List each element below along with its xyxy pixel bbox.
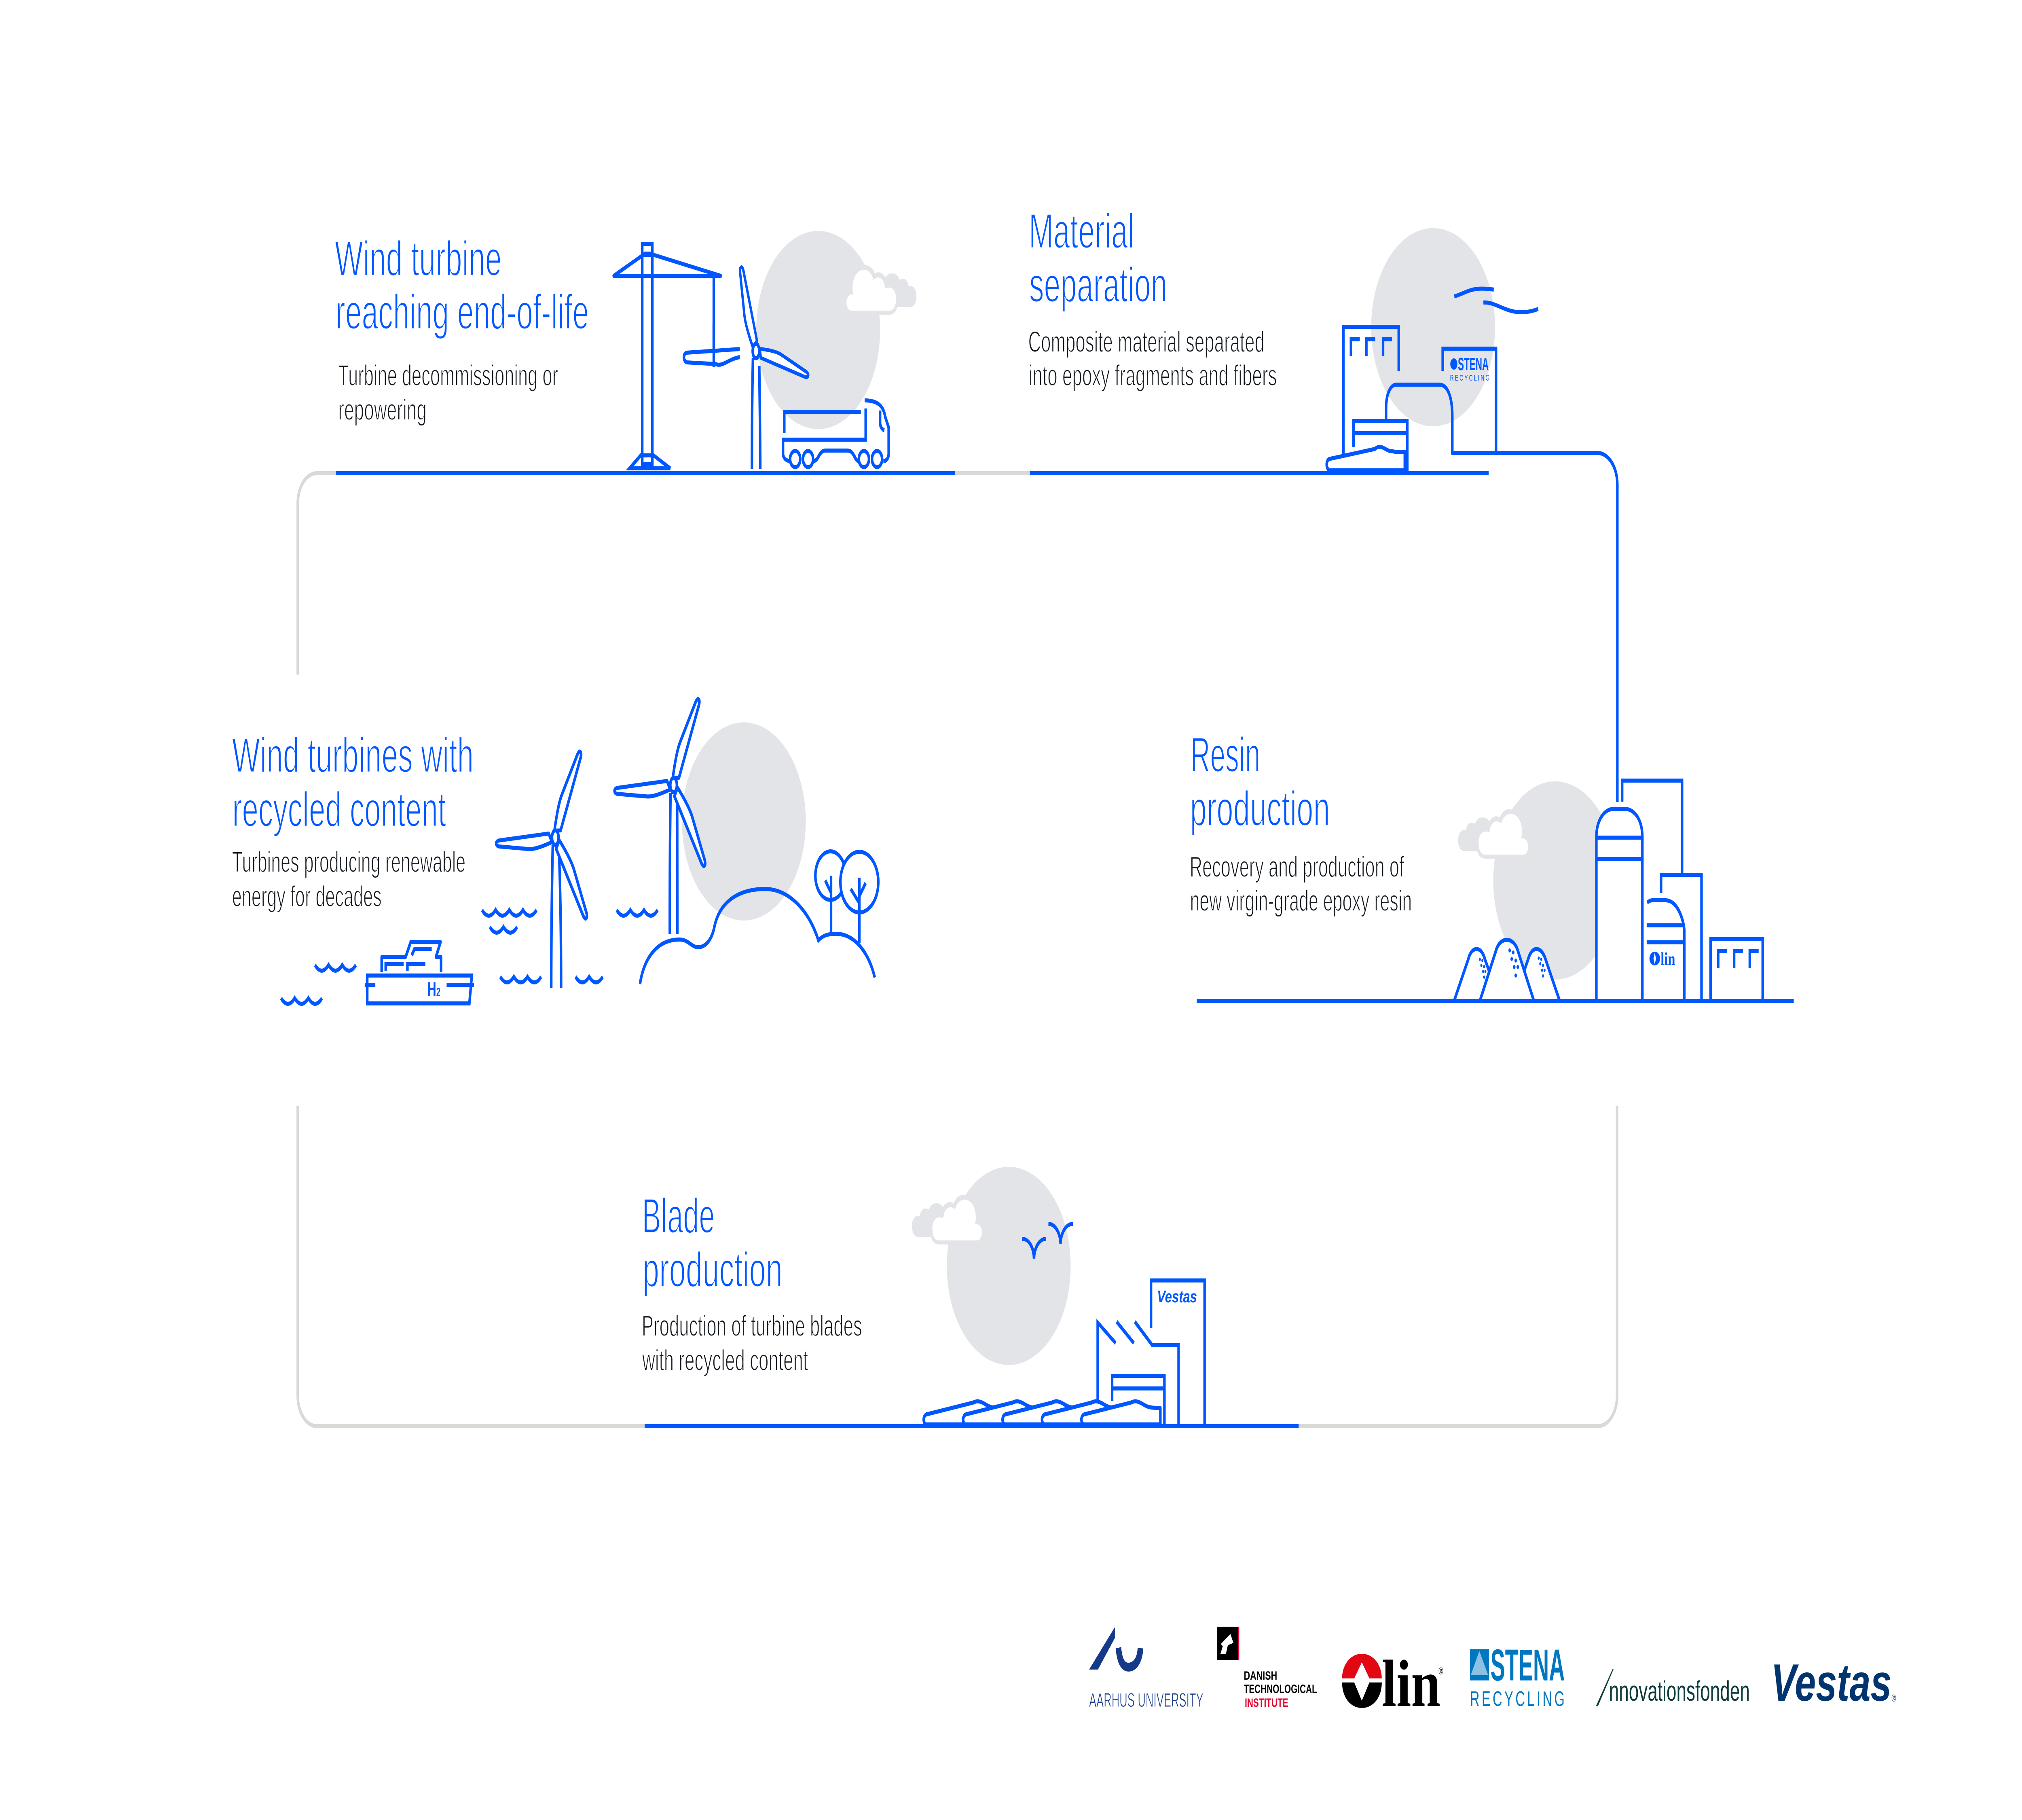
ground line	[1197, 999, 1794, 1003]
heading: resin production: production	[1190, 781, 1330, 836]
icon: truck	[782, 400, 889, 467]
logo: olin	[1342, 1646, 1443, 1721]
sun circle	[682, 722, 806, 921]
text: turbine decommissioning	[338, 359, 558, 426]
heading: wind turbines with recycled content: Wind turbines with	[232, 728, 474, 783]
logo: vestas: ®	[1892, 1693, 1896, 1704]
logo: stena recycling: STENA	[1491, 1641, 1565, 1690]
heading: resin production: Resin	[1191, 727, 1260, 782]
icon: hydrogen boat	[365, 942, 474, 1003]
sun circle	[1493, 781, 1617, 980]
panel: wind turbine reaching end-of-life	[335, 231, 955, 473]
ground line	[645, 1424, 1299, 1428]
logo: stena	[1450, 354, 1489, 383]
text: composite material: into epoxy fragments and fibers	[1029, 359, 1277, 392]
ground line	[336, 471, 955, 475]
icon: resin plant	[1597, 781, 1763, 1001]
logo: danish technological institute: TECHNOLOGICAL	[1244, 1682, 1317, 1696]
icon: hills	[640, 889, 875, 984]
text: composite material	[1028, 326, 1277, 392]
ground line	[1030, 471, 1489, 475]
logo: stena: RECYCLING	[1450, 373, 1489, 383]
icon: blade factory	[924, 1280, 1205, 1426]
logo: aarhus university	[1089, 1627, 1203, 1711]
text: recovery and production: Recovery and production of	[1190, 851, 1404, 883]
cloud	[846, 266, 916, 311]
icon: recycling plant	[1327, 327, 1617, 802]
sun circle	[756, 231, 880, 429]
text: production of blades	[642, 1310, 862, 1377]
icon: birds	[1022, 1224, 1073, 1259]
text: turbines producing	[232, 846, 465, 913]
logo: olin on tank	[1650, 949, 1675, 969]
logo: stena recycling	[1470, 1641, 1565, 1711]
text: recovery and production: new virgin-grade epoxy resin	[1190, 885, 1412, 917]
panel: wind turbines with recycled content	[232, 695, 878, 1004]
icon: turbine on land	[614, 695, 710, 934]
partner logos	[1089, 1627, 1896, 1721]
panel: blade production	[642, 1167, 1299, 1426]
sun circle	[947, 1167, 1071, 1365]
logo: stena: STENA	[1458, 354, 1489, 374]
logo: olin: ®	[1439, 1666, 1443, 1677]
text: turbine decommissioning: repowering	[338, 394, 427, 426]
text: turbines producing: Turbines producing renewable	[232, 846, 465, 878]
text: recovery and production	[1190, 851, 1412, 917]
icon: water waves	[281, 910, 658, 1004]
icon: crane lifting blade	[614, 244, 740, 468]
icon: trees	[815, 851, 878, 943]
text: production of blades: with recycled content	[642, 1344, 808, 1377]
heading: resin production	[1190, 727, 1330, 836]
icon: material piles	[1454, 940, 1560, 1001]
panel: material separation	[1028, 203, 1617, 802]
cloud	[912, 1196, 982, 1240]
heading: material separation	[1029, 203, 1167, 312]
logo: vestas on factory: Vestas	[1157, 1287, 1197, 1306]
heading: wind turbine reaching end-of-life	[335, 231, 589, 339]
icon: hydrogen boat: H2	[427, 978, 440, 1001]
text: composite material: Composite material separated	[1028, 326, 1265, 358]
logo: danish technological institute: INSTITUTE	[1245, 1696, 1288, 1710]
sun circle	[1371, 228, 1495, 426]
logo: olin on tank: lin	[1660, 949, 1675, 969]
logo: danish technological institute	[1217, 1627, 1317, 1710]
wind marks	[1454, 289, 1538, 312]
text: turbine decommissioning: Turbine decommissioning or	[338, 359, 558, 392]
logo: stena recycling: RECYCLING	[1470, 1687, 1565, 1711]
heading: material separation: Material	[1029, 203, 1134, 258]
logo: innovationsfonden: nnovationsfonden	[1609, 1676, 1750, 1707]
heading: material separation: separation	[1029, 257, 1167, 312]
logo: olin: lin	[1382, 1646, 1440, 1721]
icon: turbine at sea	[496, 748, 591, 988]
heading: wind turbines with recycled content: recycled content	[232, 782, 446, 837]
logo: aarhus university: AARHUS UNIVERSITY	[1089, 1690, 1203, 1711]
text: production of blades: Production of turbine blades	[642, 1310, 862, 1342]
logo: vestas: Vestas	[1771, 1653, 1892, 1712]
text: turbines producing: energy for decades	[232, 880, 382, 913]
cloud	[1459, 810, 1528, 855]
heading: blade production	[642, 1188, 783, 1297]
heading: wind turbine reaching end-of-life: reaching end-of-life	[335, 284, 589, 339]
heading: wind turbine reaching end-of-life: Wind turbine	[335, 231, 502, 286]
grey process loop	[298, 473, 1617, 1426]
heading: blade production: Blade	[642, 1188, 715, 1243]
logo: danish technological institute: DANISH	[1244, 1669, 1277, 1682]
icon: turbine missing a blade	[736, 267, 810, 469]
heading: blade production: production	[643, 1242, 783, 1297]
heading: wind turbines with recycled content	[232, 728, 474, 837]
panel: resin production	[1190, 727, 1794, 1001]
